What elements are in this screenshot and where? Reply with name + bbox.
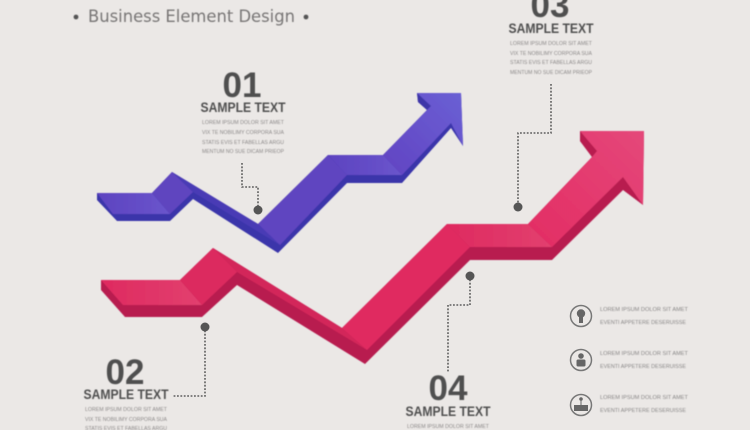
text block 04: SAMPLE TEXT (406, 404, 491, 419)
note text 3: EVENTI APPETERE DESERUISSE (600, 408, 686, 414)
text block 02: SAMPLE TEXT (84, 387, 169, 402)
list item: bulb (570, 306, 689, 326)
connector 03 (514, 84, 551, 212)
icon: open book (570, 394, 592, 416)
note text 3 (600, 395, 689, 414)
text block 02: 02 (106, 353, 144, 392)
note text 1: EVENTI APPETERE DESERUISSE (600, 320, 686, 326)
icon: person (570, 350, 592, 370)
list item: book (570, 394, 689, 416)
note text 2 (600, 351, 689, 370)
text block 03: VIX TE NOBILIMY CORPORA SUA (510, 51, 593, 57)
text block 03 (508, 0, 594, 76)
note text 3: LOREM IPSUM DOLOR SIT AMET (600, 395, 689, 401)
text block 01: STATIS EVIS ET FABELLAS ARGU (202, 140, 284, 146)
text block 03: LOREM IPSUM DOLOR SIT AMET (510, 41, 592, 47)
text block 02 (84, 353, 169, 430)
text block 01 (200, 66, 286, 155)
note text 1 (600, 307, 689, 326)
connector 02 (172, 322, 210, 396)
connector 01 (242, 163, 262, 214)
note text 2: EVENTI APPETERE DESERUISSE (600, 364, 686, 370)
text block 03: MENTUM NO SUE DICAM PRIEOP (510, 70, 593, 76)
text block 01: MENTUM NO SUE DICAM PRIEOP (202, 149, 285, 155)
text block 02: VIX TE NOBILIMY CORPORA SUA (85, 417, 168, 423)
note text 1: LOREM IPSUM DOLOR SIT AMET (600, 307, 689, 313)
title: Business Element Design (88, 7, 295, 26)
purple arrow (97, 93, 463, 253)
connector 04 (448, 272, 474, 372)
text block 01: LOREM IPSUM DOLOR SIT AMET (202, 120, 284, 126)
text block 01: VIX TE NOBILIMY CORPORA SUA (202, 130, 285, 136)
text block 01: 01 (223, 66, 261, 105)
text block 03: STATIS EVIS ET FABELLAS ARGU (510, 60, 592, 66)
text block 04: 04 (429, 369, 468, 408)
list item: person (570, 350, 689, 370)
text block 04 (406, 369, 491, 430)
text block 04: LOREM IPSUM DOLOR SIT AMET (407, 424, 489, 430)
text block 02: LOREM IPSUM DOLOR SIT AMET (85, 407, 167, 413)
text block 03: SAMPLE TEXT (508, 21, 594, 36)
text block 01: SAMPLE TEXT (200, 100, 286, 115)
icon: light bulb (570, 306, 592, 326)
pink arrow (101, 131, 644, 364)
note text 2: LOREM IPSUM DOLOR SIT AMET (600, 351, 689, 357)
